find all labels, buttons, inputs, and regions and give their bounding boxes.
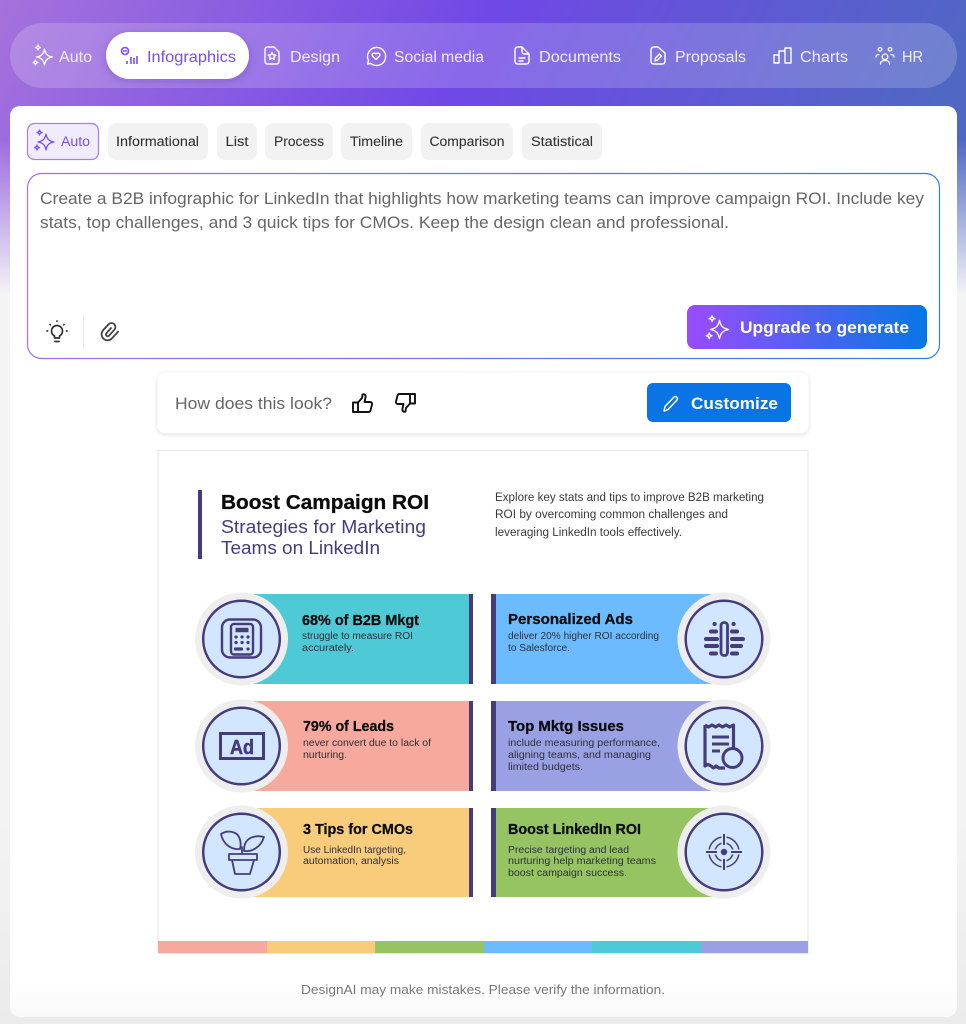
nav item: Design — [265, 47, 340, 66]
chip: Comparison — [421, 123, 513, 160]
intro paragraph — [495, 492, 764, 539]
chip: Process: Process — [274, 134, 324, 149]
infographic subtitle — [221, 517, 426, 558]
intro paragraph: ROI by overcoming common challenges and — [495, 509, 728, 521]
nav item: Proposals — [651, 47, 746, 66]
chip: Process — [265, 123, 333, 160]
category chips — [28, 123, 602, 160]
nav item: Design: Design — [290, 49, 340, 66]
stat card: Boost LinkedIn ROI — [491, 806, 770, 898]
stat card: 68% of B2B Mkgt — [195, 592, 473, 686]
infographic subtitle: Teams on LinkedIn — [221, 538, 380, 558]
chip: Timeline: Timeline — [350, 134, 403, 149]
stat card: Boost LinkedIn ROI: nurturing help marketing teams — [508, 856, 656, 867]
stat card: Top Mktg Issues: limited budgets. — [508, 762, 583, 773]
nav item: Auto — [33, 45, 92, 66]
stat card: 79% of Leads: never convert due to lack of — [303, 738, 431, 749]
header accent bar — [198, 490, 202, 559]
feedback question: How does this look? — [175, 395, 332, 413]
nav item: HR — [876, 48, 923, 66]
stat card: 68% of B2B Mkgt: 68% of B2B Mkgt — [302, 613, 419, 629]
navigation bar — [10, 23, 957, 88]
button: upgrade to generate — [687, 305, 927, 349]
icon: circuit chip — [706, 622, 743, 656]
prompt text — [40, 189, 924, 232]
nav item: Proposals: Proposals — [675, 49, 746, 66]
nav item: Infographics active — [106, 32, 249, 79]
stat card: 3 Tips for CMOs — [195, 806, 473, 898]
nav item: Documents: Documents — [539, 49, 621, 66]
icon: ad — [220, 734, 264, 759]
icon: potted plant — [221, 832, 264, 874]
nav item: Charts — [774, 48, 848, 66]
button: customize — [647, 383, 791, 422]
stat card: Top Mktg Issues — [491, 700, 770, 792]
infographic title: Boost Campaign ROI — [221, 491, 429, 514]
stat card: Personalized Ads — [491, 592, 770, 686]
intro paragraph: Explore key stats and tips to improve B2B marketing — [495, 492, 764, 504]
feedback bar — [158, 372, 808, 434]
stat card: Boost LinkedIn ROI: Boost LinkedIn ROI — [508, 822, 641, 838]
icon: light bulb — [47, 321, 67, 342]
intro paragraph: leveraging LinkedIn tools effectively. — [495, 527, 682, 539]
stat card: Top Mktg Issues: include measuring performance, — [508, 738, 660, 749]
icon: paperclip — [99, 321, 120, 343]
stat card: 3 Tips for CMOs: Use LinkedIn targeting, — [303, 845, 406, 856]
stat card: Personalized Ads: Personalized Ads — [508, 612, 633, 628]
stat card: 68% of B2B Mkgt: accurately. — [302, 643, 354, 654]
chip: Comparison: Comparison — [430, 134, 504, 149]
stat card: Top Mktg Issues: Top Mktg Issues — [508, 719, 624, 735]
chip: Informational: Informational — [116, 134, 199, 149]
colour strip — [158, 941, 808, 953]
nav item: Auto: Auto — [59, 49, 92, 66]
stat card: Personalized Ads: deliver 20% higher ROI according — [508, 631, 659, 642]
button: upgrade to generate: Upgrade to generate — [740, 318, 909, 337]
icon: target — [706, 834, 742, 870]
stat card: 3 Tips for CMOs: automation, analysis — [303, 856, 399, 867]
chip: Statistical — [522, 123, 602, 160]
icon: receipt — [705, 725, 742, 768]
infographic panel — [158, 450, 808, 954]
nav item: Charts: Charts — [800, 49, 848, 66]
nav item: Social media: Social media — [394, 49, 484, 66]
stat card: Boost LinkedIn ROI: boost campaign success. — [508, 868, 627, 879]
prompt input box — [28, 174, 940, 358]
icon: ad: Ad — [230, 737, 254, 759]
stat card: 79% of Leads: nurturing. — [303, 750, 347, 761]
nav item: Documents — [515, 47, 621, 66]
prompt text: Create a B2B infographic for LinkedIn that highlights how marketing teams can improve campaign ROI. Include key — [40, 189, 924, 208]
chip: List — [217, 123, 257, 160]
stat card: Boost LinkedIn ROI: Precise targeting and lead — [508, 845, 629, 856]
nav item: Infographics active: Infographics — [147, 49, 236, 66]
stat card: Top Mktg Issues: aligning teams, and managing — [508, 750, 651, 761]
disclaimer: DesignAI may make mistakes. Please verify the information. — [301, 982, 665, 997]
stat card: 79% of Leads — [195, 700, 473, 792]
chip: Informational — [108, 123, 208, 160]
stat card: 3 Tips for CMOs: 3 Tips for CMOs — [303, 822, 413, 838]
chip: Auto selected: Auto — [61, 134, 90, 149]
icon: thumbs down — [396, 394, 415, 412]
nav item: HR: HR — [902, 49, 923, 66]
stat card: Personalized Ads: to Salesforce. — [508, 643, 570, 654]
chip: Statistical: Statistical — [531, 134, 593, 149]
prompt text: stats, top challenges, and 3 quick tips for CMOs. Keep the design clean and professional. — [40, 213, 729, 232]
infographic subtitle: Strategies for Marketing — [221, 517, 426, 537]
nav item: Social media — [368, 47, 484, 66]
button: customize: Customize — [691, 394, 778, 413]
chip: List: List — [226, 134, 249, 149]
stat card: 79% of Leads: 79% of Leads — [303, 719, 394, 735]
icon: calculator — [222, 620, 261, 658]
icon: thumbs up — [353, 394, 372, 412]
chip: Auto selected — [28, 124, 98, 160]
chip: Timeline — [341, 123, 412, 160]
stat card: 68% of B2B Mkgt: struggle to measure ROI — [302, 631, 413, 642]
